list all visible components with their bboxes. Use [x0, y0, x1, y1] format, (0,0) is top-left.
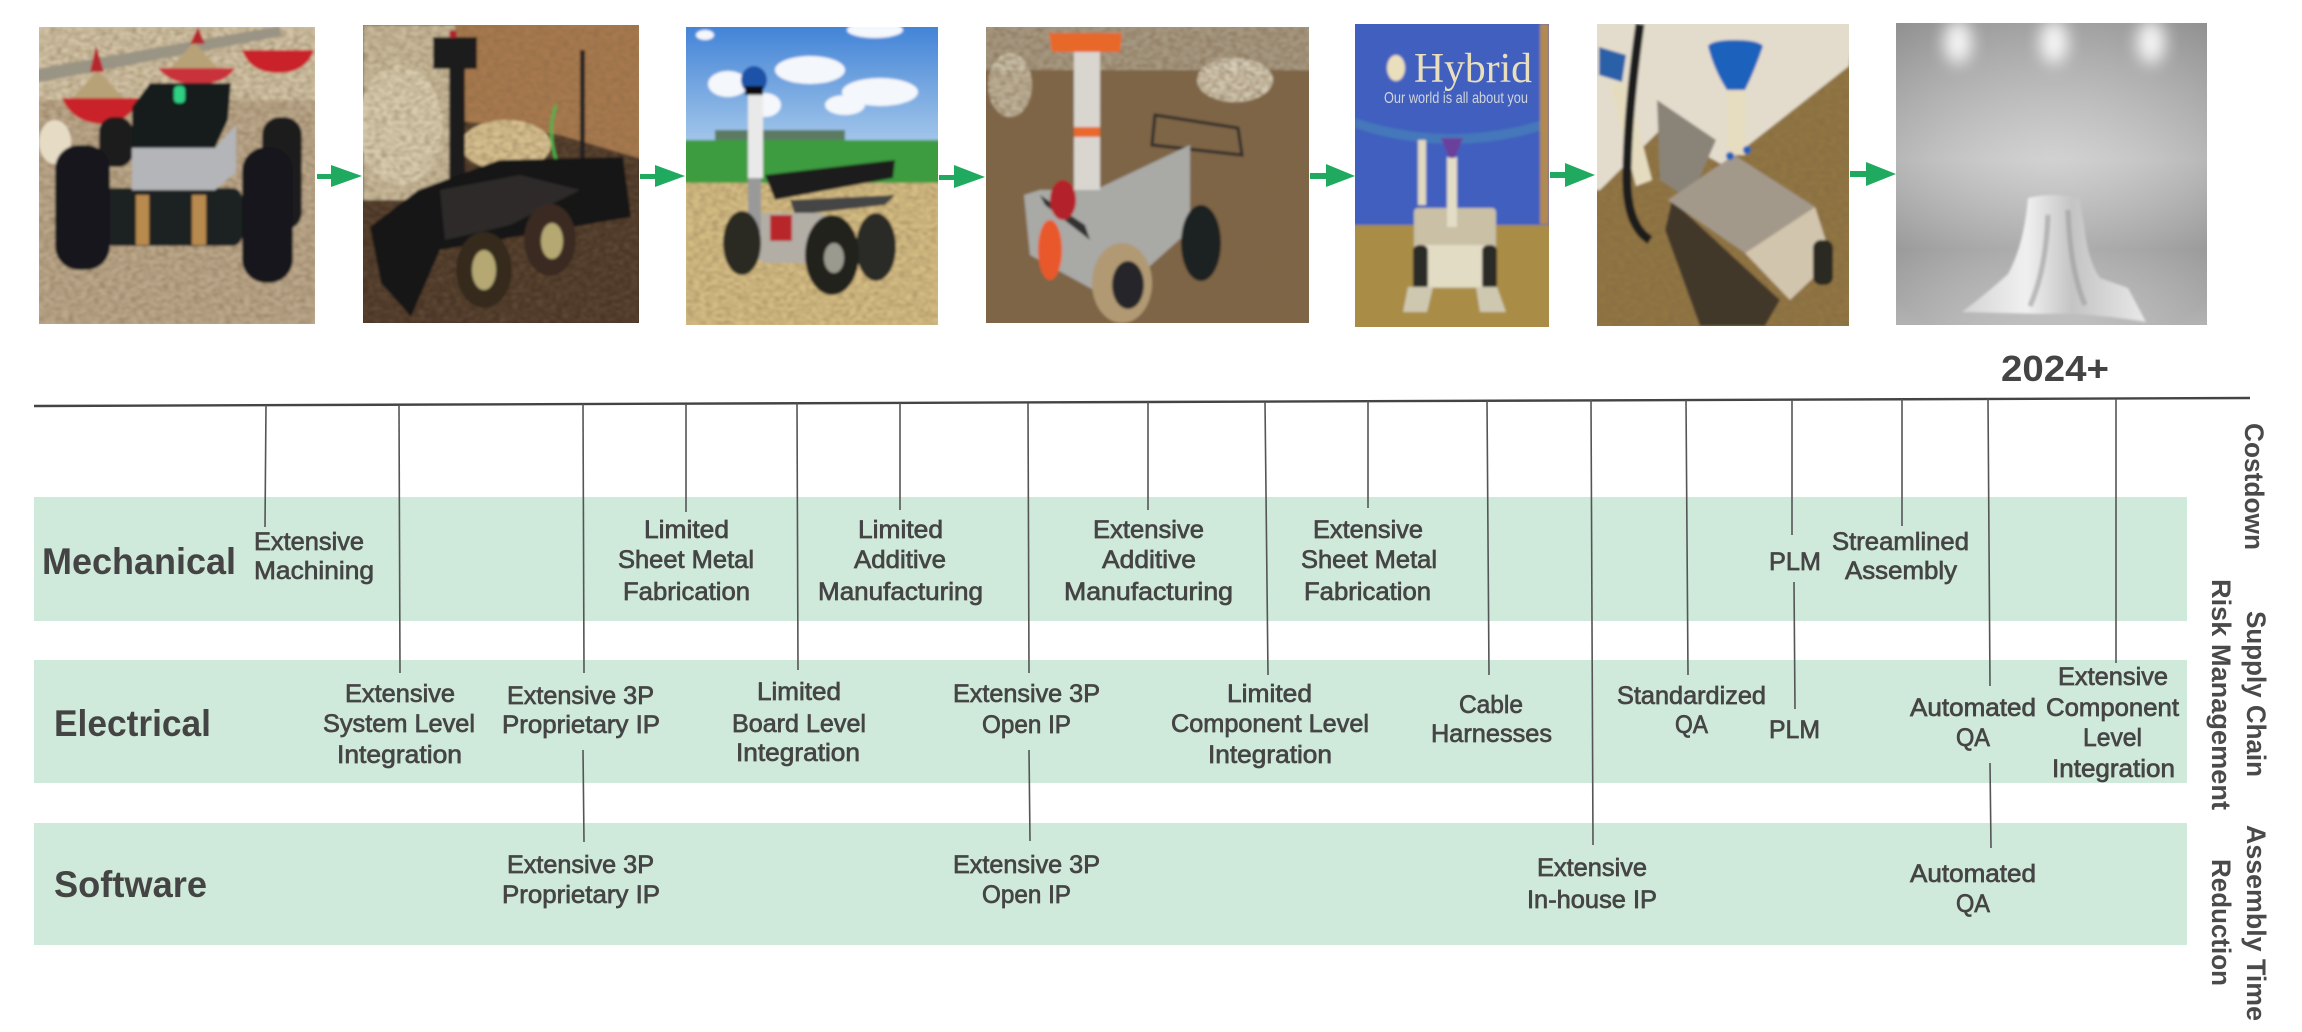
arrow 3 [939, 165, 985, 188]
label: Limited Component Level Integration: Integration [1208, 741, 1332, 769]
heading: Electrical: Electrical [54, 703, 211, 744]
heading: Mechanical: Mechanical [42, 541, 236, 582]
label: Extensive 3P Open IP electrical: Open IP [982, 711, 1071, 739]
label: Extensive Machining: Machining [254, 557, 374, 585]
label: Automated QA software: Automated [1910, 860, 2036, 888]
label: Limited Board Level Integration: Board Level [732, 710, 866, 738]
side label: Costdown: Costdown [2239, 423, 2269, 550]
label: Standardized QA: Standardized [1617, 682, 1766, 710]
label: Extensive Component Level Integration: Integration [2052, 755, 2175, 783]
label: Limited Sheet Metal Fabrication: Limited [644, 516, 729, 544]
label: Extensive Machining: Extensive [254, 528, 364, 556]
banner wordmark: Hybrid [1414, 46, 1532, 92]
label: Extensive In-house IP: Extensive [1537, 854, 1647, 882]
heading: Software: Software [54, 864, 207, 905]
label: Limited Board Level Integration: Limited [757, 678, 841, 706]
arrow 6 [1850, 162, 1896, 186]
photo 4: silver rover with orange accents in barn [986, 27, 1309, 323]
label: PLM mechanical: PLM [1769, 548, 1821, 576]
side label: Supply Chain Risk Management: Supply Chain [2241, 611, 2271, 777]
label: Standardized QA [1617, 682, 1766, 739]
label: Extensive System Level Integration: Extensive [345, 680, 455, 708]
side label: Assembly Time Reduction: Assembly Time [2241, 825, 2271, 1021]
label: Limited Board Level Integration: Integration [736, 739, 860, 767]
label: Cable Harnesses: Cable [1459, 691, 1523, 719]
band: electrical [34, 660, 2187, 783]
label: Cable Harnesses: Harnesses [1431, 720, 1552, 748]
label: Limited Sheet Metal Fabrication: Fabrication [623, 578, 750, 606]
side label: Supply Chain Risk Management [2206, 579, 2271, 810]
label: Standardized QA: QA [1675, 711, 1708, 739]
photo 2: black tracked robot with turkeys [363, 25, 639, 323]
label: Automated QA software [1910, 860, 2036, 918]
label: Limited Sheet Metal Fabrication: Sheet Metal [618, 546, 754, 574]
year label: 2024+ [2001, 348, 2109, 389]
label: Extensive 3P Proprietary IP software: Extensive 3P [507, 851, 654, 879]
band: mechanical [34, 497, 2187, 621]
photo 6: blue-topped robot with translucent cover near wall [1597, 24, 1849, 326]
label: Automated QA electrical: Automated [1910, 694, 2036, 722]
label: Extensive Additive Manufacturing: Manufacturing [1064, 578, 1233, 606]
label: Extensive Component Level Integration: Component [2046, 694, 2179, 722]
label: PLM electrical: PLM [1769, 716, 1820, 744]
photo 7: future robot under white cloth [1896, 23, 2207, 325]
label: Extensive 3P Proprietary IP electrical: Extensive 3P [507, 682, 654, 710]
arrow 5 [1550, 163, 1595, 187]
label: Extensive System Level Integration [323, 680, 475, 769]
label: Extensive In-house IP [1527, 854, 1657, 914]
side label: Supply Chain Risk Management: Risk Management [2206, 579, 2236, 810]
label: Extensive 3P Open IP software: Open IP [982, 881, 1071, 909]
label: Extensive Machining [254, 528, 374, 585]
label: Extensive Component Level Integration [2046, 663, 2179, 783]
label: Extensive System Level Integration: Integration [337, 741, 462, 769]
label: Extensive 3P Open IP electrical [953, 680, 1100, 739]
photo 5: rover in front of Hybrid banner [1355, 24, 1549, 327]
label: Extensive Sheet Metal Fabrication [1301, 516, 1437, 606]
label: Limited Additive Manufacturing [818, 516, 983, 606]
arrow 2 [640, 165, 685, 187]
label: Extensive In-house IP: In-house IP [1527, 886, 1657, 914]
label: Cable Harnesses [1431, 691, 1552, 748]
label: Automated QA software: QA [1956, 890, 1990, 918]
label: Extensive 3P Proprietary IP electrical: Proprietary IP [502, 711, 660, 739]
label: Streamlined Assembly [1832, 528, 1969, 585]
label: Extensive Component Level Integration: Extensive [2058, 663, 2168, 691]
label: Limited Additive Manufacturing: Limited [858, 516, 943, 544]
label: Limited Component Level Integration: Limited [1227, 680, 1312, 708]
timeline axis and connector lines [34, 398, 2250, 848]
label: Limited Component Level Integration: Component Level [1171, 710, 1369, 738]
label: Limited Additive Manufacturing: Manufacturing [818, 578, 983, 606]
label: Extensive Sheet Metal Fabrication: Fabrication [1304, 578, 1431, 606]
label: Extensive Additive Manufacturing: Additive [1102, 546, 1196, 574]
label: Extensive Sheet Metal Fabrication: Extensive [1313, 516, 1423, 544]
photo 3: rover in a field under blue sky [686, 27, 938, 325]
label: Limited Sheet Metal Fabrication [618, 516, 754, 606]
label: Streamlined Assembly: Assembly [1845, 557, 1958, 585]
label: Limited Additive Manufacturing: Additive [854, 546, 946, 574]
label: Extensive 3P Open IP electrical: Extensive 3P [953, 680, 1100, 708]
side label: Assembly Time Reduction [2206, 825, 2271, 1021]
band: software [34, 823, 2187, 945]
label: Extensive Component Level Integration: Level [2083, 724, 2142, 752]
arrow 1 [317, 165, 362, 187]
label: Limited Board Level Integration [732, 678, 866, 767]
label: Limited Component Level Integration [1171, 680, 1369, 769]
label: Extensive 3P Open IP software: Extensive 3P [953, 851, 1100, 879]
label: Automated QA electrical [1910, 694, 2036, 752]
label: Extensive 3P Proprietary IP software: Proprietary IP [502, 881, 660, 909]
label: Automated QA electrical: QA [1956, 724, 1990, 752]
side label: Assembly Time Reduction: Reduction [2206, 859, 2236, 986]
label: Extensive 3P Proprietary IP electrical [502, 682, 660, 739]
photo 1: tracked rover among poultry feeders [39, 27, 315, 324]
label: Extensive 3P Proprietary IP software [502, 851, 660, 909]
label: Extensive Additive Manufacturing: Extensive [1093, 516, 1204, 544]
label: Streamlined Assembly: Streamlined [1832, 528, 1969, 556]
label: Extensive Sheet Metal Fabrication: Sheet Metal [1301, 546, 1437, 574]
label: Extensive Additive Manufacturing [1064, 516, 1233, 606]
arrow 4 [1310, 164, 1355, 187]
label: Extensive System Level Integration: System Level [323, 710, 475, 738]
label: Extensive 3P Open IP software [953, 851, 1100, 909]
